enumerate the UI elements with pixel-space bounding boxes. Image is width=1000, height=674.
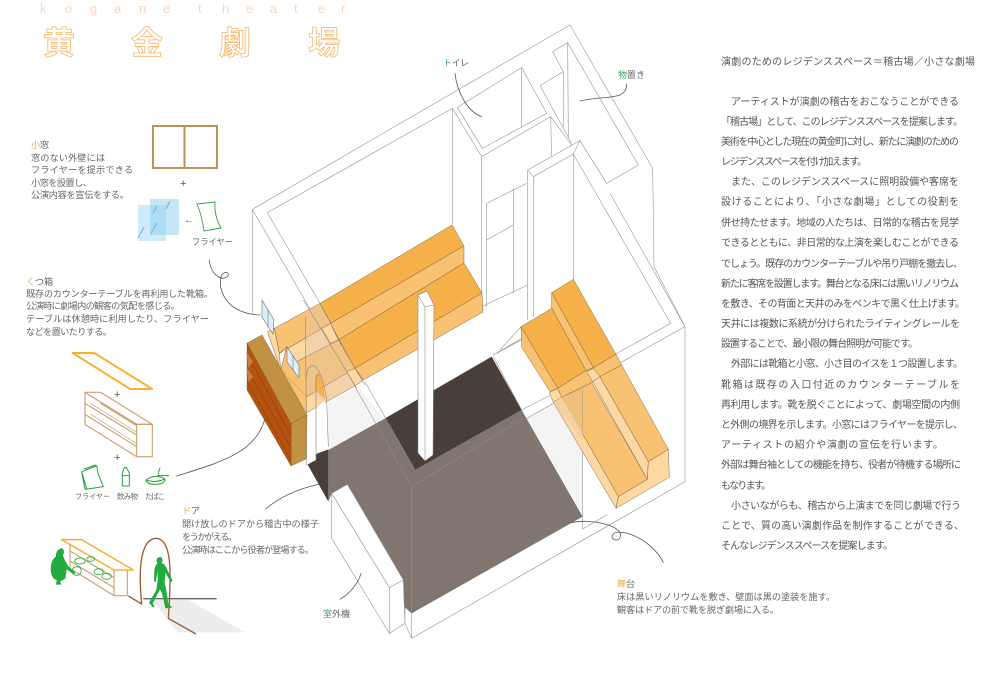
front row seat xyxy=(338,263,482,368)
icon: glass panes xyxy=(138,199,179,241)
label: 物置き: 物置き xyxy=(618,69,645,80)
door threshold black xyxy=(307,449,328,502)
text: 舞台: 床は黒いリノリウムを敷き、壁面は黒の塗装を施す。 xyxy=(617,591,835,602)
back row seat xyxy=(320,225,464,323)
upper seat top xyxy=(274,303,331,353)
heading: right column: 演劇のためのレジデンススペース＝稽古場／小さな劇場 xyxy=(721,55,975,68)
text: ドア: 公演時はここから役者が登場する。 xyxy=(182,544,314,555)
body text: 新たに客席を設置します。舞台となる床には黒いリノリウム xyxy=(721,277,959,290)
left audience seating xyxy=(267,225,483,413)
icons: flyers drink tobacco xyxy=(82,465,169,489)
walking person xyxy=(149,557,173,608)
icon: small window frame xyxy=(153,126,217,168)
shoes xyxy=(72,557,111,579)
arrow: ← xyxy=(184,215,194,226)
text: 小窓 xyxy=(31,140,133,200)
body text xyxy=(721,95,965,552)
shoe box on building xyxy=(247,335,307,466)
icon labels: 飲み物 xyxy=(117,491,138,501)
title: 黄金劇場: 黄 xyxy=(43,25,75,61)
text: ドア: 開け放しのドアから稽古中の様子 xyxy=(182,518,319,529)
translucent wall lines over seats xyxy=(303,300,365,388)
body text: できるとともに、非日常的な上演を楽しむことができる xyxy=(721,236,959,249)
body text: を敷き、その背面と天井のみをペンキで黒く仕上げます。 xyxy=(721,297,965,310)
body text: 外部は舞台袖としての機能を持ち、役者が待機する場所に xyxy=(721,458,961,471)
label: トイレ: トイレ xyxy=(443,58,469,68)
central column xyxy=(418,291,434,461)
body text: と外側の境界を示します。小窓にはフライヤーを提示し、 xyxy=(721,418,963,431)
title: latin subtitle: kogane xyxy=(40,1,170,16)
title: 黄金劇場 xyxy=(43,25,340,61)
body text: もなります。 xyxy=(721,480,771,492)
icon labels: フライヤー xyxy=(75,492,110,501)
body text: レジデンススペースを付け加えます。 xyxy=(721,155,867,168)
body text: また、このレジデンススペースに照明設備や客席を xyxy=(731,175,959,188)
title: 黄金劇場: 劇 xyxy=(219,25,251,61)
text: 舞台: 舞台 xyxy=(617,578,635,589)
text: ドア: ドア xyxy=(182,506,200,516)
flyer label: フライヤー xyxy=(192,237,233,247)
illustration: door with walking person xyxy=(128,538,245,634)
body text: 設置することで、最小限の舞台照明が可能です。 xyxy=(721,337,918,350)
shelf xyxy=(70,545,127,596)
plus signs: + xyxy=(114,389,120,401)
body text: アーティストの紹介や演劇の宣伝を行います。 xyxy=(721,438,943,451)
back wall black xyxy=(385,357,522,470)
text: 舞台 xyxy=(617,578,835,615)
title: 黄金劇場: 場 xyxy=(308,25,340,61)
text: 小窓: 窓のない外壁には xyxy=(31,152,105,163)
plus signs: + xyxy=(114,452,120,464)
crouching person xyxy=(51,548,75,585)
icon labels xyxy=(75,491,165,501)
label: 室外機: 室外機 xyxy=(323,608,350,619)
small windows on wall xyxy=(262,300,299,378)
body text: 靴箱は既存の入口付近のカウンターテーブルを xyxy=(721,378,960,391)
counter top diagram xyxy=(73,353,152,389)
body text: 再利用します。靴を脱ぐことによって、劇場空間の内側 xyxy=(721,398,960,411)
text: くつ箱: テーブルは休憩時に利用したり、フライヤー xyxy=(26,313,209,324)
body text: 小さいながらも、稽古から上演までを同じ劇場で行う xyxy=(731,499,961,512)
body text: 天井には複数に系統が分けられたライティングレールを xyxy=(721,317,960,330)
text: くつ箱: 既存のカウンターテーブルを再利用した靴箱。 xyxy=(26,288,213,299)
text: 小窓: 小窓 xyxy=(31,140,49,150)
text: くつ箱 xyxy=(26,276,213,337)
floor shadow xyxy=(152,600,245,632)
door frame xyxy=(128,538,196,634)
body text: 美術を中心とした現在の黄金町に対し、新たに演劇のための xyxy=(721,135,959,148)
title: latin subtitle: theater xyxy=(198,1,346,16)
body text: そんなレジデンススペースを提案します。 xyxy=(721,539,893,552)
text: 小窓: 小窓を設置し、 xyxy=(31,178,92,188)
text: 舞台: 観客はドアの前で靴を脱ぎ劇場に入る。 xyxy=(617,604,779,615)
text: 小窓: 公演内容を宣伝をする。 xyxy=(31,189,129,200)
shelf unit diagram xyxy=(85,392,152,457)
axonometric drawing: floor and back wall xyxy=(307,357,583,613)
body text: 設けることにより、「小さな劇場」としての役割を xyxy=(721,195,959,208)
body text: 外部には靴箱と小窓、小さ目のイスを１つ設置します。 xyxy=(731,357,963,370)
stage floor grey xyxy=(328,410,583,613)
floor line xyxy=(143,597,217,601)
text: ドア: をうかがえる。 xyxy=(182,531,237,542)
leader lines xyxy=(177,73,663,599)
translucent wall overlay xyxy=(306,303,355,402)
text: くつ箱: くつ箱 xyxy=(26,276,53,287)
illustration: person at shoe box xyxy=(51,540,133,596)
text: くつ箱: 公演時に劇場内の観客の気配を感じる。 xyxy=(26,300,180,311)
icon: flyer xyxy=(197,202,221,231)
body text: 「稽古場」として、このレジデンススペースを提案します。 xyxy=(721,115,963,128)
body text: でしょう。既存のカウンターテーブルや吊り戸棚を撤去し、 xyxy=(721,257,963,270)
door arch xyxy=(306,366,328,465)
body text: ことで、質の高い演劇作品を制作することができる、 xyxy=(721,519,964,532)
text: ドア xyxy=(182,506,319,555)
icon labels: たばこ xyxy=(145,492,165,501)
title: 黄金劇場: 金 xyxy=(131,25,163,61)
counter lid xyxy=(62,540,133,570)
body text: 併せ持たせます。地域の人たちは、日常的な稽古を見学 xyxy=(721,216,959,229)
text: 小窓: フライヤーを提示できる xyxy=(31,165,133,175)
plus sign: + xyxy=(180,178,186,190)
text: くつ箱: などを置いたりする。 xyxy=(26,327,112,337)
right audience seating xyxy=(521,279,669,508)
translucent wall tint xyxy=(328,387,583,515)
plus signs xyxy=(114,389,120,464)
wall and room outlines xyxy=(252,25,685,638)
pale strips xyxy=(279,323,338,362)
body text: アーティストが演劇の稽古をおこなうことができる xyxy=(731,95,959,108)
